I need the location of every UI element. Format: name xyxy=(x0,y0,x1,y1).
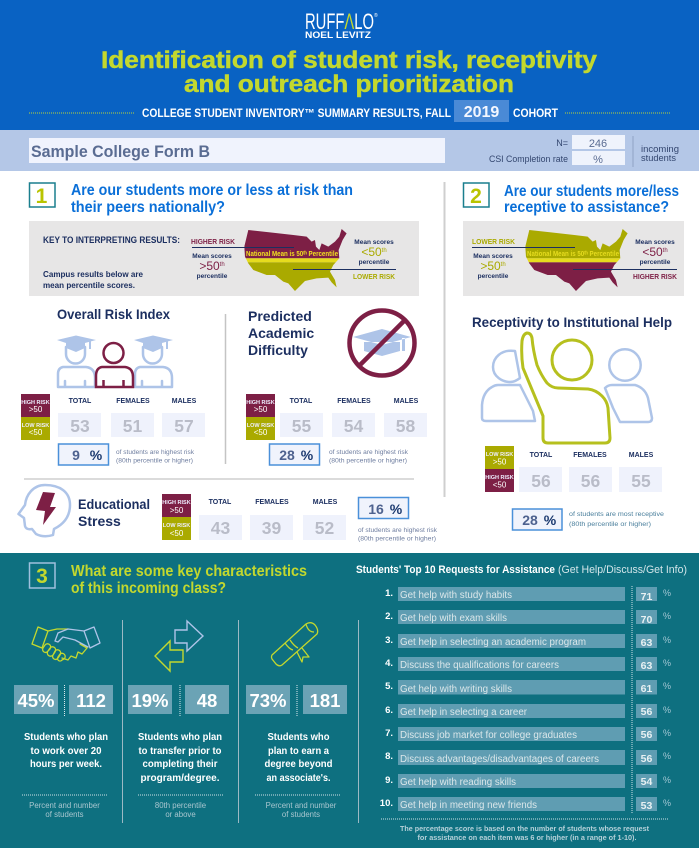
scores: predicted academic difficulty: 54 xyxy=(344,416,363,436)
logo: NOEL LEVITZ xyxy=(305,30,372,40)
request 7 xyxy=(385,727,671,741)
request 4: % xyxy=(663,658,671,668)
callout: 16 percent highest risk: 16 xyxy=(368,501,384,517)
section 1 heading: Are our students more or less at risk than xyxy=(71,182,353,199)
column: work over 20 hours: 112 xyxy=(76,690,106,711)
lower risk label xyxy=(293,239,396,281)
scores: predicted academic difficulty: FEMALES xyxy=(337,398,371,405)
footnote: The percentage score is based on the number of students whose request xyxy=(400,824,649,833)
legend: risk scale 1: >50 xyxy=(29,405,43,414)
legend: risk scale 1: <50 xyxy=(29,428,43,437)
lower risk label: >50 xyxy=(480,259,501,273)
top 10 requests heading: Students' Top 10 Requests for Assistance xyxy=(356,564,555,576)
scores: predicted academic difficulty: MALES xyxy=(394,398,419,405)
request 1: 1. xyxy=(385,588,393,599)
icon: transfer arrows xyxy=(155,621,203,671)
higher risk label xyxy=(191,237,294,280)
legend: risk scale 3: LOW RISK xyxy=(163,523,190,529)
header banner xyxy=(0,0,699,130)
column: degree beyond associate's: Percent and number xyxy=(266,801,337,810)
cohort size and completion rate: students xyxy=(641,153,676,164)
lower risk label: th xyxy=(501,262,506,268)
column: plan to transfer: program/degree. xyxy=(140,773,220,784)
column: degree beyond associate's: an associate's. xyxy=(266,773,331,784)
subtitle with cohort year xyxy=(29,100,671,122)
lower risk label: <50 xyxy=(361,245,382,259)
scores: overall risk index: FEMALES xyxy=(116,398,150,405)
section 3 heading xyxy=(71,563,307,597)
higher risk label: HIGHER RISK xyxy=(633,272,678,281)
legend: risk scale 3: HIGH RISK xyxy=(162,500,191,506)
request 9: Get help with reading skills xyxy=(400,777,516,788)
higher risk label: <50 xyxy=(642,245,663,259)
column: degree beyond associate's: 181 xyxy=(310,690,340,711)
callout: 9 percent highest risk: (80th percentile or higher) xyxy=(116,458,193,464)
callout: 28 percent highest risk: of students are highest risk xyxy=(329,449,409,456)
request 1: Get help with study habits xyxy=(400,590,512,601)
request 4: 63 xyxy=(641,660,652,672)
lower risk label: LOWER RISK xyxy=(472,237,516,246)
logo: ® xyxy=(374,12,378,19)
request 7: % xyxy=(663,728,671,738)
predicted academic difficulty heading: Academic xyxy=(248,325,314,341)
column: work over 20 hours: hours per week. xyxy=(30,759,102,770)
icon: three students xyxy=(57,336,173,387)
callout: 16 percent highest risk: % xyxy=(390,501,403,517)
column: degree beyond associate's: plan to earn a xyxy=(268,746,329,757)
callout: 9 percent highest risk xyxy=(58,444,195,465)
column: degree beyond associate's: Students who xyxy=(268,732,330,743)
educational stress heading xyxy=(78,496,150,529)
educational stress heading: Educational xyxy=(78,496,150,512)
legend: risk scale 2: LOW RISK xyxy=(247,423,274,429)
map: national mean reversed xyxy=(525,229,628,291)
request 8: 56 xyxy=(641,753,652,765)
callout: 28 percent highest risk xyxy=(270,444,409,465)
column: degree beyond associate's: 73% xyxy=(249,690,287,711)
scores: receptivity: 56 xyxy=(581,471,600,491)
lower risk label: percentile xyxy=(478,273,509,280)
legend: risk scale 2 xyxy=(246,394,275,440)
column: work over 20 hours xyxy=(14,627,113,819)
footnote: for assistance on each item was 6 or higher (in a range of 1-10). xyxy=(418,833,636,842)
college name field: Sample College Form B xyxy=(31,142,210,161)
scores: receptivity: 56 xyxy=(531,471,551,491)
request 2: 2. xyxy=(385,611,393,622)
callout: 9 percent highest risk: of students are highest risk xyxy=(116,449,195,456)
request 6: 6. xyxy=(385,705,393,716)
title xyxy=(101,47,598,98)
callout: 28 percent highest risk: 28 xyxy=(279,447,295,463)
request 9: % xyxy=(663,775,671,785)
request 2: % xyxy=(663,611,671,621)
scores: educational stress: MALES xyxy=(313,499,338,506)
column: degree beyond associate's xyxy=(246,623,347,819)
key to interpreting results xyxy=(29,221,419,296)
request 10: 53 xyxy=(641,800,652,812)
higher risk label: percentile xyxy=(197,273,228,280)
scores: predicted academic difficulty: 58 xyxy=(396,416,415,436)
predicted academic difficulty heading: Difficulty xyxy=(248,342,308,358)
request 6: Get help in selecting a career xyxy=(400,707,528,718)
request 1: % xyxy=(663,588,671,598)
section 1 number badge: 1 xyxy=(36,185,48,208)
cohort size and completion rate: 246 xyxy=(589,138,607,150)
column: plan to transfer: completing their xyxy=(142,759,218,770)
column: work over 20 hours: 45% xyxy=(17,690,55,711)
subtitle with cohort year: COLLEGE STUDENT INVENTORY™ SUMMARY RESULTS, FALL xyxy=(142,108,451,120)
map: national mean xyxy=(244,229,346,291)
key to receptivity results xyxy=(463,221,684,296)
request 6: % xyxy=(663,705,671,715)
column: plan to transfer: to transfer prior to xyxy=(138,746,222,757)
legend: risk scale 2: >50 xyxy=(254,405,268,414)
callout: 28 percent most receptive xyxy=(512,509,664,530)
legend: risk scale 1: HIGH RISK xyxy=(21,400,50,406)
request 2: Get help with exam skills xyxy=(400,613,507,624)
request 8: Discuss advantages/disadvantages of careers xyxy=(400,754,599,765)
request 5: 5. xyxy=(385,681,393,692)
column: plan to transfer: 48 xyxy=(197,690,217,711)
request 5: % xyxy=(663,681,671,691)
scores: receptivity: FEMALES xyxy=(573,452,607,459)
predicted academic difficulty heading xyxy=(248,308,314,358)
scores: predicted academic difficulty xyxy=(280,398,427,437)
scores: educational stress: TOTAL xyxy=(209,499,232,506)
icon: crossed-out graduation cap xyxy=(350,310,414,376)
legend: risk scale 2: <50 xyxy=(254,428,268,437)
section 2 heading: Are our students more/less xyxy=(504,183,679,200)
column: work over 20 hours: Percent and number xyxy=(29,801,100,810)
section 2 number badge xyxy=(464,183,489,208)
callout: 16 percent highest risk xyxy=(358,498,438,542)
section 1 heading xyxy=(71,182,353,216)
educational stress heading: Stress xyxy=(78,513,121,529)
legend: receptivity scale: <50 xyxy=(493,480,507,490)
request 5 xyxy=(385,680,671,695)
column: degree beyond associate's: degree beyond xyxy=(264,759,332,770)
section 3 heading: of this incoming class? xyxy=(71,580,226,597)
section 1 heading: their peers nationally? xyxy=(71,199,225,216)
higher risk label: Mean scores xyxy=(192,253,232,260)
legend: receptivity scale: >50 xyxy=(493,458,507,466)
icon: handshake xyxy=(32,627,100,661)
top 10 requests heading: (Get Help/Discuss/Get Info) xyxy=(558,564,687,576)
legend: risk scale 2: HIGH RISK xyxy=(246,400,275,406)
request 2 xyxy=(385,610,671,626)
section 3 heading: What are some key characteristics xyxy=(71,563,307,580)
scores: overall risk index: 57 xyxy=(174,416,194,436)
scores: receptivity: TOTAL xyxy=(530,452,553,459)
scores: receptivity: 55 xyxy=(631,471,651,491)
section 2 heading: receptive to assistance? xyxy=(504,199,669,216)
higher risk label xyxy=(573,239,678,281)
higher risk label: HIGHER RISK xyxy=(191,237,236,246)
legend: risk scale 1 xyxy=(21,394,50,440)
map: national mean reversed: National Mean is 50ᵗʰ Percentile xyxy=(527,249,619,258)
column: plan to transfer xyxy=(128,621,229,819)
map: national mean: National Mean is 50ᵗʰ Percentile xyxy=(246,249,338,258)
lower risk label: Mean scores xyxy=(473,253,513,260)
legend: risk scale 3: <50 xyxy=(170,529,184,538)
request 9: 9. xyxy=(385,775,393,786)
scores: predicted academic difficulty: TOTAL xyxy=(290,398,313,405)
section 3 number badge xyxy=(30,563,55,588)
section 3 number badge: 3 xyxy=(36,565,48,588)
scores: overall risk index: 51 xyxy=(123,416,142,436)
request 8: 8. xyxy=(385,751,393,762)
higher risk label: th xyxy=(220,262,225,268)
scores: educational stress: 52 xyxy=(315,518,334,538)
panel: section 1 risk xyxy=(18,182,438,542)
request 5: 61 xyxy=(641,683,652,695)
request 6: 56 xyxy=(641,706,652,718)
request 3: Get help in selecting an academic program xyxy=(400,637,586,648)
icon: diploma scroll xyxy=(272,623,318,666)
higher risk label: th xyxy=(663,248,668,254)
request 1 xyxy=(385,587,671,603)
request 8 xyxy=(385,750,671,765)
section 2 heading xyxy=(504,183,679,216)
legend: risk scale 3 xyxy=(162,494,191,540)
higher risk label: Mean scores xyxy=(635,239,675,246)
callout: 28 percent most receptive: (80th percentile or higher) xyxy=(569,521,651,528)
scores: educational stress xyxy=(199,499,346,540)
request 2: 70 xyxy=(641,614,652,626)
cohort size and completion rate: incoming xyxy=(641,144,679,155)
request 7: 56 xyxy=(641,729,652,741)
column: plan to transfer: Students who plan xyxy=(138,732,222,743)
section 2 number badge: 2 xyxy=(470,185,482,208)
callout: 16 percent highest risk: of students are highest risk xyxy=(358,527,438,534)
predicted academic difficulty heading: Predicted xyxy=(248,308,312,324)
lower risk label: th xyxy=(382,248,387,254)
request 4 xyxy=(385,657,671,672)
request 8: % xyxy=(663,751,671,761)
request 5: Get help with writing skills xyxy=(400,684,512,695)
scores: overall risk index xyxy=(58,398,205,437)
request 3: % xyxy=(663,635,671,645)
request 10: 10. xyxy=(380,798,393,809)
request 6 xyxy=(385,704,671,718)
column: plan to transfer: 80th percentile xyxy=(155,801,206,810)
request 10 xyxy=(380,797,671,812)
legend: risk scale 3: >50 xyxy=(170,506,184,515)
cohort size and completion rate: CSI Completion rate xyxy=(489,154,568,164)
title: Identification of student risk, receptivity xyxy=(101,47,598,74)
title: and outreach prioritization xyxy=(184,71,514,98)
request 4: Discuss the qualifications for careers xyxy=(400,660,559,671)
college name field xyxy=(29,138,445,163)
subtitle with cohort year: COHORT xyxy=(513,108,558,120)
scores: overall risk index: MALES xyxy=(172,398,197,405)
overall risk index heading: Overall Risk Index xyxy=(57,306,170,322)
column: degree beyond associate's: of students xyxy=(282,810,320,819)
callout: 28 percent highest risk: % xyxy=(301,447,314,463)
icon: head with lightning bolt xyxy=(18,485,70,536)
cohort size and completion rate: N= xyxy=(556,138,568,148)
legend: receptivity scale: HIGH RISK xyxy=(485,475,514,481)
scores: educational stress: 39 xyxy=(262,518,281,538)
column: work over 20 hours: Students who plan xyxy=(24,732,108,743)
higher risk label: >50 xyxy=(199,259,220,273)
request 3: 3. xyxy=(385,635,393,646)
scores: predicted academic difficulty: 55 xyxy=(292,416,311,436)
callout: 28 percent highest risk: (80th percentile or higher) xyxy=(329,458,407,464)
panel: section 3 characteristics xyxy=(0,553,699,848)
lower risk label: LOWER RISK xyxy=(353,272,396,281)
request 4: 4. xyxy=(385,658,393,669)
request 7: 7. xyxy=(385,728,393,739)
section 1 number badge xyxy=(30,183,55,208)
scores: receptivity: MALES xyxy=(629,452,654,459)
callout: 28 percent most receptive: % xyxy=(544,512,557,528)
lower risk label xyxy=(472,237,575,280)
callout: 9 percent highest risk: 9 xyxy=(72,447,80,463)
icon: students with raised hand xyxy=(482,333,652,443)
scores: overall risk index: TOTAL xyxy=(69,398,92,405)
legend: risk scale 1: LOW RISK xyxy=(22,423,49,429)
callout: 16 percent highest risk: (80th percentile or higher) xyxy=(358,536,436,542)
key to interpreting results: KEY TO INTERPRETING RESULTS: xyxy=(43,235,180,245)
top 10 requests heading xyxy=(356,564,687,576)
lower risk label: Mean scores xyxy=(354,239,394,246)
scores: educational stress: 43 xyxy=(211,518,230,538)
column: work over 20 hours: to work over 20 xyxy=(30,746,102,757)
key to interpreting results: mean percentile scores. xyxy=(43,281,135,290)
callout: 9 percent highest risk: % xyxy=(90,447,103,463)
legend: receptivity scale xyxy=(485,446,514,492)
footnote xyxy=(400,824,649,842)
request 9 xyxy=(385,774,671,788)
column: work over 20 hours: of students xyxy=(45,810,84,819)
cohort size and completion rate xyxy=(489,135,679,167)
logo: RUFFΛLO xyxy=(305,9,374,34)
request 10: % xyxy=(663,798,671,808)
callout: 28 percent most receptive: of students are most receptive xyxy=(569,511,664,518)
panel: section 2 receptivity xyxy=(463,183,684,530)
request 9: 54 xyxy=(641,776,652,788)
request 7: Discuss job market for college graduates xyxy=(400,730,577,741)
receptivity heading: Receptivity to Institutional Help xyxy=(472,314,672,330)
request 10: Get help in meeting new friends xyxy=(400,800,537,811)
subtitle with cohort year: 2019 xyxy=(464,104,499,121)
scores: overall risk index: 53 xyxy=(70,416,90,436)
request 3 xyxy=(385,634,671,649)
scores: educational stress: FEMALES xyxy=(255,499,289,506)
scores: receptivity xyxy=(519,452,662,492)
legend: receptivity scale: LOW RISK xyxy=(486,452,513,458)
column: plan to transfer: or above xyxy=(165,810,196,819)
chart: top 10 requests list xyxy=(380,586,671,813)
request 1: 71 xyxy=(641,591,652,603)
callout: 28 percent most receptive: 28 xyxy=(522,512,538,528)
institution band xyxy=(0,130,699,171)
lower risk label: percentile xyxy=(359,259,390,266)
cohort size and completion rate: % xyxy=(593,154,603,166)
key to interpreting results: Campus results below are xyxy=(43,270,143,279)
request 3: 63 xyxy=(641,637,652,649)
higher risk label: percentile xyxy=(640,259,671,266)
column: plan to transfer: 19% xyxy=(131,690,169,711)
